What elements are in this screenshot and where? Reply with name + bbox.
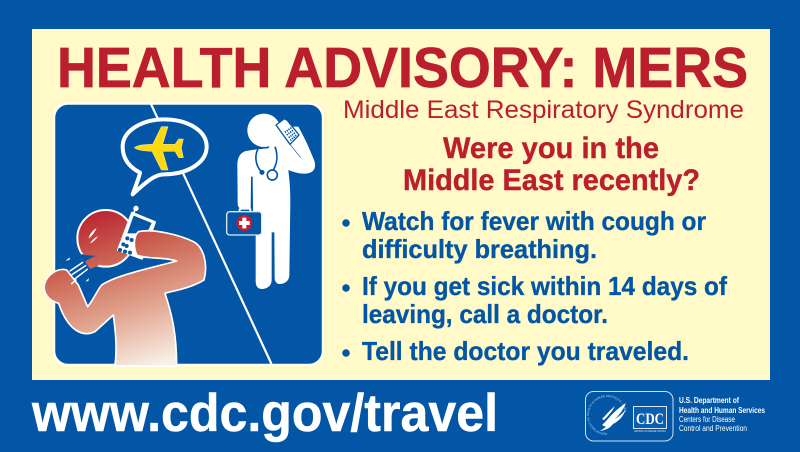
- agency name text: Control and Prevention: [679, 424, 747, 433]
- bullet two: [342, 271, 727, 329]
- cell phone: [118, 213, 155, 259]
- doctor phone: [276, 116, 299, 144]
- agency logos: [585, 391, 765, 442]
- brow marks: [89, 228, 98, 243]
- stethoscope: [256, 147, 277, 180]
- panel background: [54, 104, 323, 365]
- phone body: [118, 213, 155, 259]
- bullet two: If you get sick within 14 days of: [362, 271, 727, 301]
- red circle emblem: [236, 215, 252, 231]
- phone antenna: [133, 206, 139, 211]
- agency name text: Centers for Disease: [679, 415, 735, 424]
- cream advisory panel: [32, 29, 770, 380]
- doctor on phone: [227, 114, 315, 289]
- doctor head: [247, 114, 281, 147]
- illustration panel: [44, 104, 323, 366]
- stethoscope tube: [256, 147, 277, 172]
- body and arms: [44, 231, 206, 366]
- agency name text: [679, 396, 765, 433]
- bullet one: [342, 206, 706, 264]
- seal ring text: DEPARTMENT OF HEALTH & HUMAN SERVICES • USA •: [586, 394, 626, 436]
- CDC caption: CENTERS FOR DISEASE CONTROL: [634, 429, 666, 433]
- CDC logo box: CDC: [636, 411, 664, 428]
- bullet three: Tell the doctor you traveled.: [362, 336, 689, 366]
- bullet one: difficulty breathing.: [362, 234, 597, 264]
- speech bubble: [123, 119, 207, 194]
- eagle mark: [600, 403, 626, 431]
- doctor body: [237, 127, 315, 289]
- stethoscope end: [260, 171, 264, 174]
- website url: www.cdc.gov/travel: [31, 384, 498, 443]
- phone screen: [127, 216, 152, 233]
- question line two: Middle East recently?: [403, 164, 700, 197]
- mouth cone: [85, 256, 99, 269]
- white cross: [239, 218, 250, 228]
- title: HEALTH ADVISORY: MERS: [57, 36, 748, 100]
- bag handle: [239, 208, 251, 213]
- arm contour: [290, 144, 301, 158]
- head: [77, 210, 134, 267]
- medical bag: [227, 208, 262, 235]
- logo outline: [586, 392, 673, 441]
- droplets: [65, 257, 89, 282]
- bag body: [227, 212, 262, 235]
- phone keypad: [118, 236, 134, 255]
- subtitle: Middle East Respiratory Syndrome: [343, 96, 744, 124]
- coughing traveler: [44, 206, 206, 366]
- speech bubble with airplane: [123, 119, 207, 194]
- agency name text: U.S. Department of: [679, 396, 739, 405]
- phone body: [276, 118, 299, 144]
- mouth notch: [73, 254, 97, 275]
- stethoscope chest piece: [267, 170, 277, 180]
- HHS seal: [586, 394, 626, 436]
- question heading: [403, 132, 700, 197]
- phone antenna: [283, 116, 286, 120]
- diagonal divider: [151, 104, 272, 364]
- agency name text: Health and Human Services: [679, 406, 765, 415]
- bullet one: Watch for fever with cough or: [362, 206, 706, 236]
- phone keypad: [285, 128, 296, 140]
- CDC logo box: [634, 406, 666, 428]
- advice list: [342, 206, 727, 366]
- bullet two: leaving, call a doctor.: [362, 299, 608, 329]
- airplane: [134, 127, 183, 170]
- question line one: Were you in the: [443, 132, 659, 165]
- cough spray: [70, 262, 87, 284]
